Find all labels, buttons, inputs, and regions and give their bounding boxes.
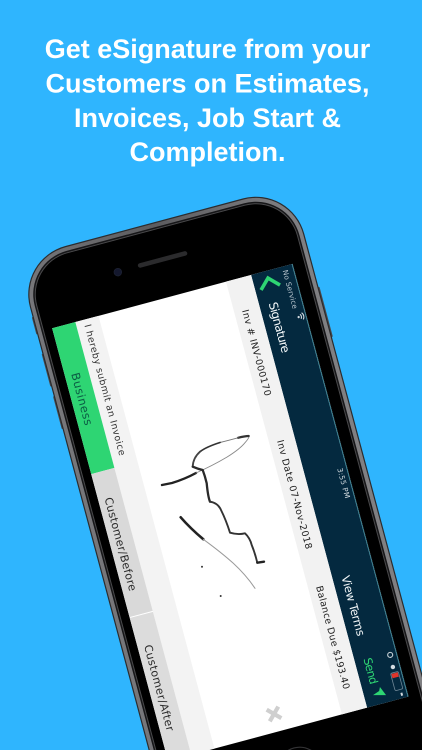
icon: charging bolt (400, 693, 403, 696)
status line (292, 264, 408, 697)
button: view terms: View Terms (338, 574, 368, 638)
icon: clear signature (267, 707, 281, 721)
icon: side buttons (32, 243, 338, 429)
tab: business (52, 322, 114, 474)
status: no service: No Service (281, 269, 300, 310)
title: Get eSignature from your (45, 34, 371, 64)
tab: customer before: Customer/Before (102, 496, 139, 593)
title (45, 34, 371, 167)
icon: camera (113, 267, 122, 277)
title: Invoices, Job Start & (74, 103, 341, 133)
statement strip (75, 316, 214, 750)
icon: speaker (137, 251, 188, 268)
icon: alarm (390, 664, 396, 670)
phone body (17, 185, 422, 750)
heading: signature: Signature (266, 301, 293, 354)
status: time: 3:55 PM (335, 467, 352, 499)
title: Customers on Estimates, (45, 68, 370, 98)
icon: location (387, 652, 393, 658)
phone (16, 185, 422, 750)
navy header bar (251, 264, 409, 708)
icon: wifi (297, 312, 305, 321)
invoice number: Inv # INV-000170 (239, 308, 273, 397)
invoice info strip (226, 275, 367, 714)
tab: customer after: Customer/After (141, 643, 177, 733)
invoice date: Inv Date 07-Nov-2018 (274, 439, 314, 550)
button: send (360, 656, 386, 699)
signature drawing (162, 436, 264, 597)
screen background (52, 264, 409, 750)
tab: customer after (130, 612, 191, 750)
icon: back chevron (259, 276, 280, 290)
app screen (52, 264, 409, 750)
balance due: Balance Due $193.40 (313, 585, 351, 691)
icon: battery (390, 671, 403, 691)
title: Completion. (130, 137, 286, 167)
tab: customer before (91, 468, 153, 617)
tab: business: Business (68, 371, 96, 427)
button: send: Send (360, 656, 381, 686)
icon: home button (273, 742, 327, 750)
statement text: I hereby submit an Invoice (82, 323, 127, 457)
